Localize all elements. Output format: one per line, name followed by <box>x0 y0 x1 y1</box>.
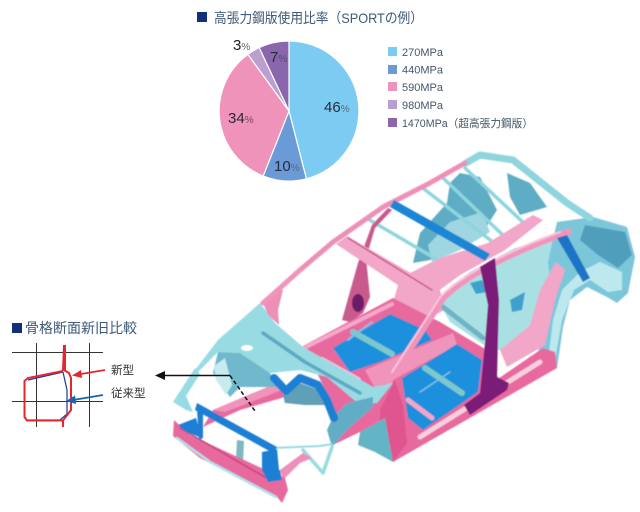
pink floor cross member <box>365 333 457 388</box>
slice: 1470MPa 7% <box>259 41 289 111</box>
engine bay dark part <box>283 383 332 405</box>
rear quarter panel <box>535 217 635 372</box>
sill highlight <box>420 362 540 437</box>
pink cowl left <box>263 290 283 325</box>
pie value labels: 34% <box>228 110 254 127</box>
fender apron upper mass <box>195 303 393 405</box>
near C pillar blue <box>557 235 590 282</box>
rear floor details <box>470 280 525 312</box>
slice: 590MPa 34% <box>219 54 289 176</box>
label: new type: 新型 <box>111 363 134 377</box>
slice: 980MPa 3% <box>248 48 289 111</box>
legend: 270MPa <box>402 47 444 59</box>
near A pillar base <box>380 380 407 462</box>
rear roof rail <box>466 155 590 218</box>
pie value labels: 10% <box>274 158 300 175</box>
slice: 270MPa 46% <box>289 41 359 179</box>
lower right front longitudinal <box>280 453 312 480</box>
rear far side inner panels <box>413 173 547 263</box>
pie chart <box>219 41 359 181</box>
heading: steel usage ratio: 高張力鋼版使用比率（SPORTの例） <box>214 10 423 26</box>
pie value labels <box>228 37 350 175</box>
left strut tower <box>213 352 277 397</box>
far B pillar hole <box>352 294 364 312</box>
floor pink frame <box>303 298 500 462</box>
heading: section comparison: 骨格断面新旧比較 <box>25 320 137 336</box>
new section outline <box>24 345 71 427</box>
legend: 1470MPa（超高張力鋼版） <box>402 116 533 130</box>
legend: 440MPa <box>402 64 444 76</box>
rail highlight <box>392 232 560 372</box>
cross-section diagram <box>12 343 105 427</box>
car body structure <box>173 155 635 503</box>
arrow old <box>66 395 103 404</box>
rear floor ribs <box>408 368 462 418</box>
near roof rail and A pillar <box>388 232 568 382</box>
frame teal strip <box>443 307 483 338</box>
bumper ridge <box>180 428 270 480</box>
strut tower highlight <box>214 358 232 395</box>
quarter panel highlight <box>548 262 622 360</box>
front longitudinal pink left <box>203 383 285 427</box>
arrow new <box>72 370 105 378</box>
mid cross member dark line <box>348 238 432 290</box>
roof blue cross bar <box>390 200 490 261</box>
rear cabin floor <box>437 240 562 352</box>
side sill <box>393 348 557 462</box>
flange <box>62 345 66 371</box>
legend <box>388 47 533 130</box>
center grille strut <box>236 440 244 463</box>
pie value labels: 3% <box>233 37 250 54</box>
bumper lower cyan edge <box>177 438 276 497</box>
far roof rail <box>300 163 465 270</box>
bumper beam <box>173 420 288 503</box>
near B pillar purple <box>464 258 509 415</box>
rear roof cross bars <box>368 168 527 273</box>
longitudinal highlight <box>213 383 282 412</box>
fender thin rails <box>273 444 332 473</box>
pie value labels: 46% <box>324 99 350 116</box>
fender inner channel <box>263 333 360 393</box>
shock tower hole <box>241 345 253 351</box>
rear floor blue <box>402 344 482 430</box>
pie value labels: 7% <box>270 49 287 66</box>
pink mid cross member <box>336 236 445 322</box>
front floor blue <box>333 314 432 372</box>
rear floor cross member pink <box>405 215 543 292</box>
right strut tower <box>327 397 373 447</box>
far side B pillar <box>342 208 392 322</box>
label: old type: 従来型 <box>111 386 146 400</box>
left fender strip <box>173 368 200 412</box>
far A pillar <box>263 270 300 303</box>
slice: 440MPa 10% <box>263 111 306 181</box>
blue S member <box>274 378 334 418</box>
quarter panel shadow <box>580 225 632 268</box>
legend: 590MPa <box>402 82 444 94</box>
pointer arrow to section <box>155 371 255 411</box>
old section outline <box>28 372 67 420</box>
radiator support blue <box>178 403 282 482</box>
grid <box>12 343 103 427</box>
rear door sill pink <box>500 262 565 367</box>
cowl teal detail <box>358 418 393 462</box>
front floor ribs <box>322 322 392 380</box>
legend: 980MPa <box>402 100 444 112</box>
floor frame light top <box>306 304 392 347</box>
